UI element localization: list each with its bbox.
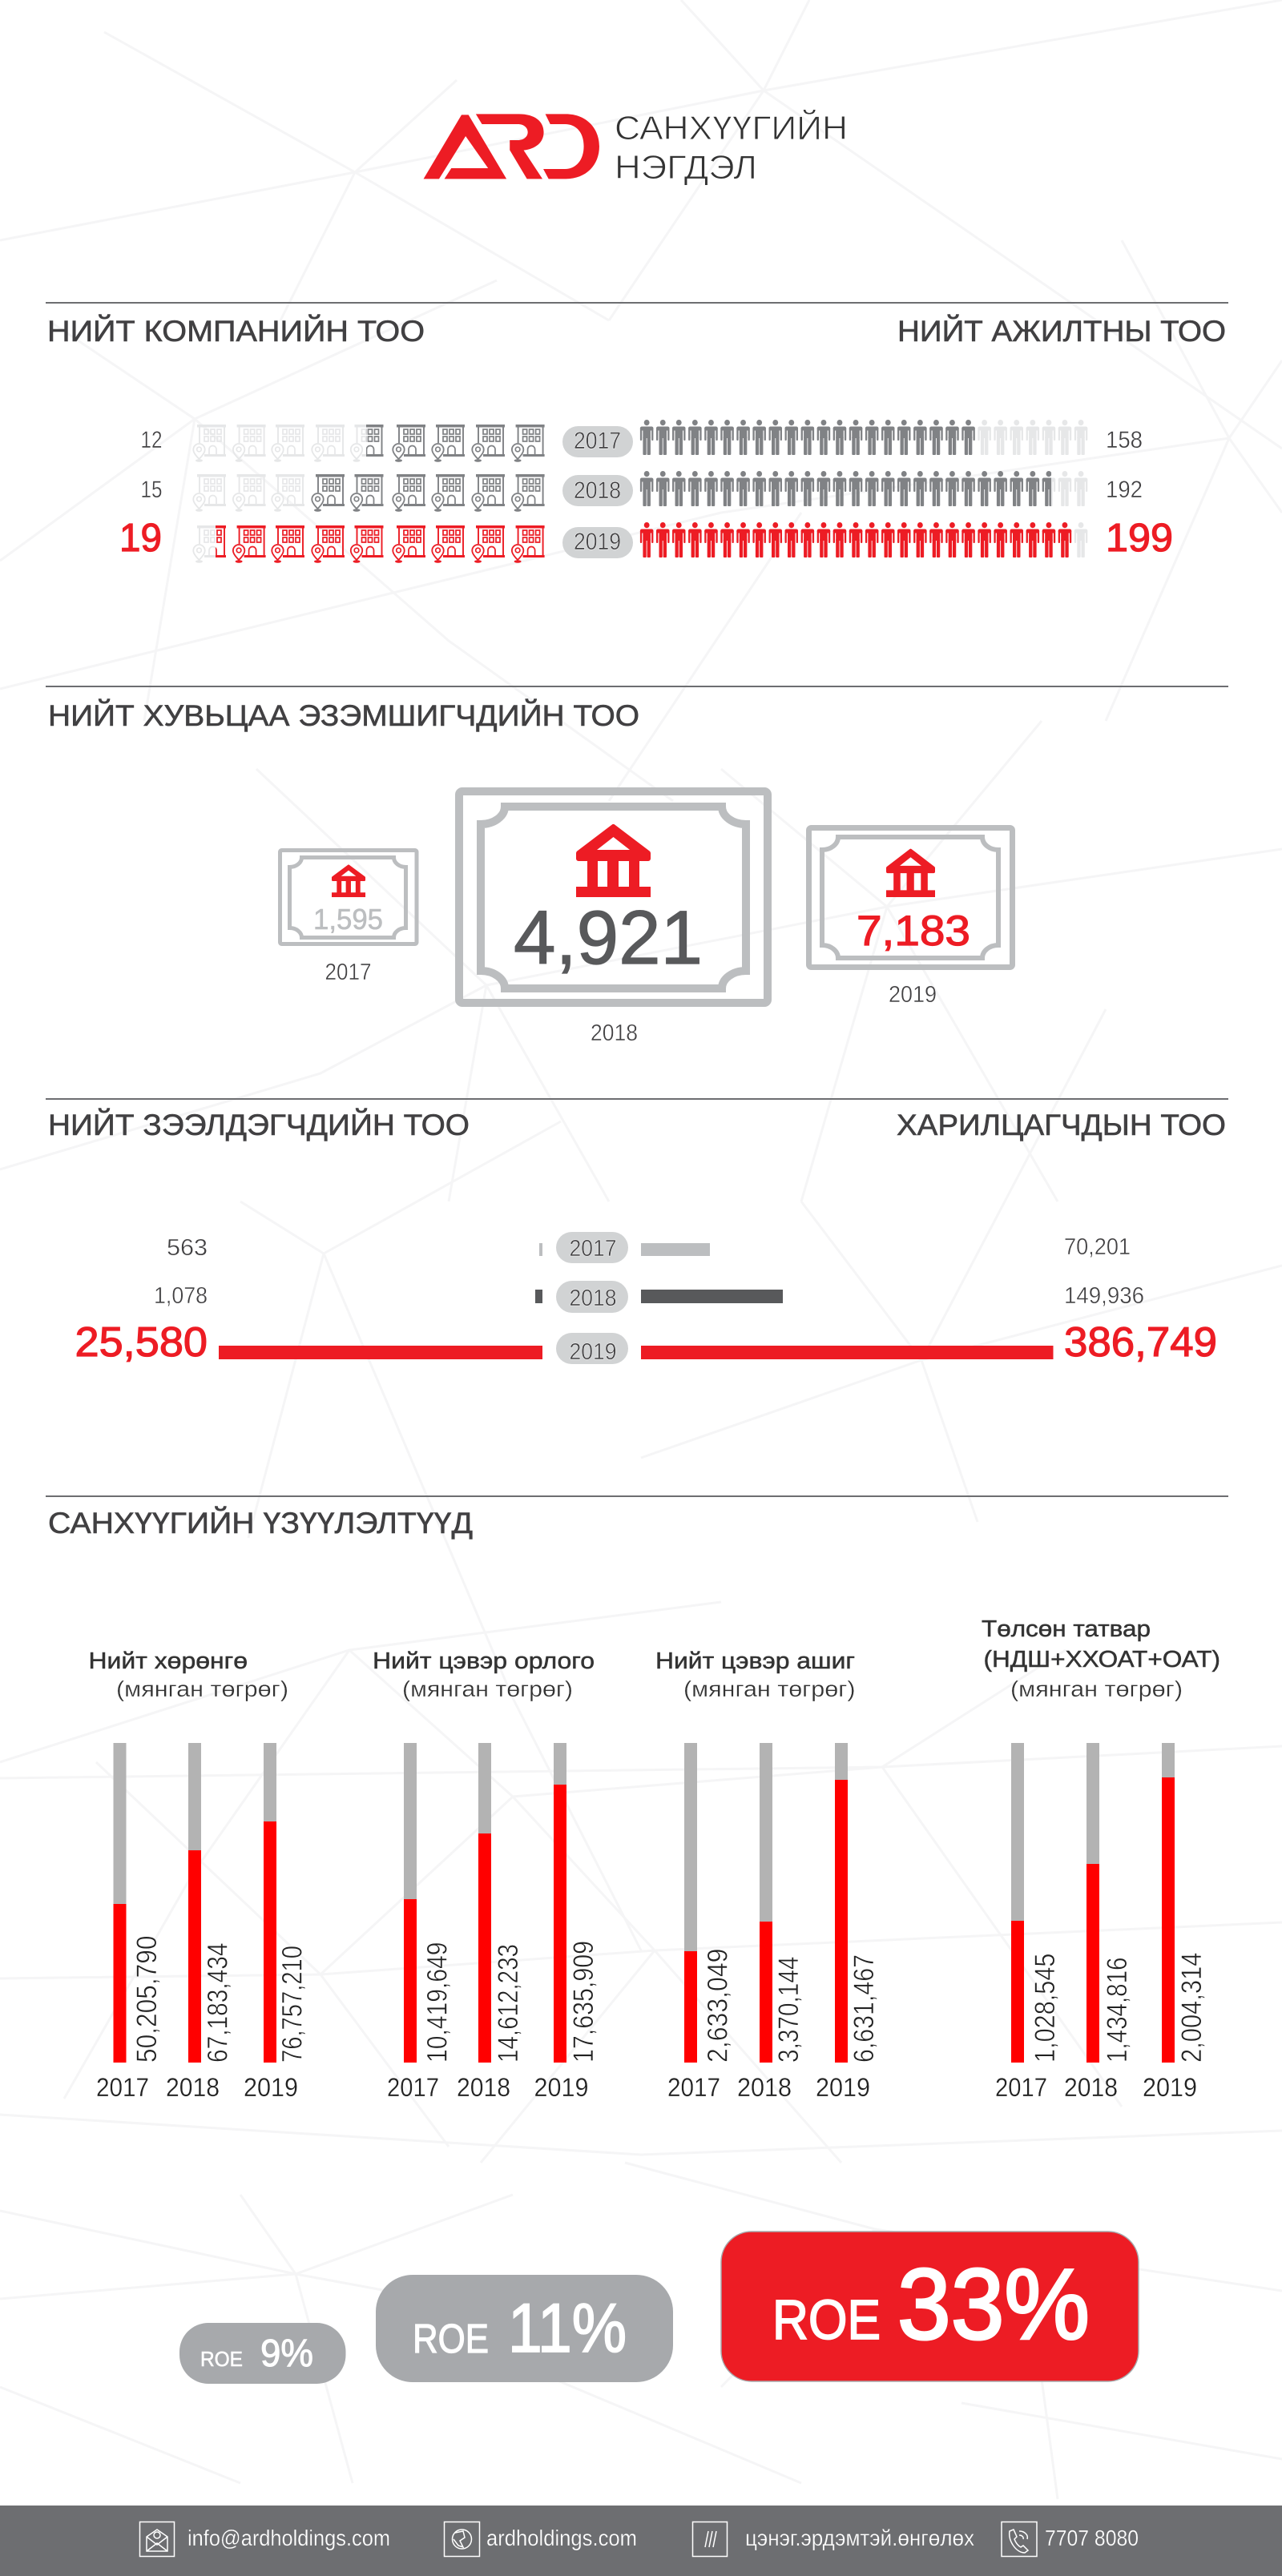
certificate 2017: 2017 [325, 960, 372, 985]
text: website: ardholdings.com [486, 2526, 637, 2550]
heading: financial indicators: САНХҮҮГИЙН ҮЗҮҮЛЭЛТҮҮД [48, 1506, 473, 1540]
icon row: buildings 2019 [193, 525, 545, 563]
employee counts: 158 [1106, 427, 1143, 453]
heading: total companies: НИЙТ КОМПАНИЙН ТОО [47, 314, 425, 348]
logo: ARD Санхүүгийн Нэгдэл [424, 108, 848, 186]
decorative section rules [46, 303, 1228, 1496]
chart title [655, 1648, 856, 1701]
chart title: (мянган төгрөг) [1010, 1676, 1183, 1701]
certificate 2017 [280, 851, 417, 985]
chart title: (мянган төгрөг) [116, 1676, 288, 1701]
icon: slashes [692, 2522, 728, 2557]
year pills [562, 426, 633, 558]
badge: ROE 11%: ROE [413, 2316, 489, 2361]
company counts: 12 [141, 427, 162, 453]
chart title [982, 1616, 1220, 1701]
text: slogan: цэнэг.эрдэмтэй.өнгөлөх [745, 2526, 974, 2550]
borrower values [75, 1235, 208, 1366]
certificate 2019: 2019 [889, 982, 937, 1008]
company counts: 15 [141, 477, 162, 503]
certificate 2019: 7,183 [857, 908, 970, 955]
chart title: Нийт цэвэр орлого [373, 1648, 595, 1674]
badge: ROE 11%: 11% [508, 2290, 627, 2367]
logo wordmark: САНХҮҮГИЙН [615, 108, 848, 147]
panel: financial indicators [48, 1506, 1220, 2102]
years [995, 2073, 1197, 2102]
values: 1,028,545 [1030, 1953, 1061, 2063]
certificate 2019 [809, 828, 1013, 1008]
values: 17,635,909 [568, 1941, 599, 2063]
icon row: buildings 2018 [193, 474, 545, 512]
chart title: Нийт хөрөнгө [88, 1648, 248, 1674]
values: 3,370,144 [773, 1956, 804, 2063]
panel: ROE badges [179, 2232, 1139, 2384]
years [96, 2073, 298, 2102]
customer values: 70,201 [1064, 1234, 1131, 1260]
year pills [556, 1232, 628, 1365]
chart: net income [373, 1648, 599, 2102]
certificate 2018 [459, 791, 768, 1046]
certificate 2018: 4,921 [514, 896, 703, 980]
chart title: (мянган төгрөг) [683, 1676, 856, 1701]
company counts [119, 427, 162, 560]
heading: total shareholders: НИЙТ ХУВЬЦАА ЭЗЭМШИГЧДИЙН ТОО [48, 698, 639, 732]
values [1030, 1953, 1207, 2063]
borrower values: 563 [167, 1235, 208, 1261]
values: 1,434,816 [1102, 1958, 1133, 2063]
panel: shareholders [48, 698, 1013, 1046]
customer values: 386,749 [1064, 1319, 1217, 1366]
chart: net profit [655, 1648, 880, 2102]
certificate 2018: 2018 [591, 1020, 638, 1046]
values [131, 1935, 308, 2063]
chart title: Төлсөн татвар [982, 1616, 1151, 1642]
years: 2019 [244, 2073, 298, 2102]
values: 6,631,467 [849, 1954, 880, 2063]
years: 2018 [737, 2073, 792, 2102]
text: phone: 7707 8080 [1045, 2526, 1139, 2550]
icon: website globe [444, 2522, 479, 2557]
employee counts: 199 [1106, 517, 1173, 560]
years: 2019 [816, 2073, 870, 2102]
badge: ROE 9%: 9% [260, 2332, 313, 2375]
years [387, 2073, 588, 2102]
years: 2017 [387, 2073, 439, 2102]
years: 2018 [166, 2073, 220, 2102]
bars [684, 1743, 848, 2063]
chart title [373, 1648, 595, 1701]
chart: taxes paid [982, 1616, 1220, 2102]
year pills: 2017 [574, 428, 621, 454]
chart: total assets [88, 1648, 308, 2102]
values: 10,419,649 [421, 1942, 454, 2063]
badge: ROE 9% [179, 2323, 346, 2384]
badge: ROE 33% [721, 2232, 1139, 2381]
years: 2017 [667, 2073, 720, 2102]
text: email: info@ardholdings.com [187, 2526, 390, 2550]
years: 2018 [1064, 2073, 1118, 2102]
values: 76,757,210 [277, 1946, 308, 2063]
values: 14,612,233 [493, 1944, 524, 2063]
years: 2017 [995, 2073, 1047, 2102]
icon row: people 2017 [640, 420, 1087, 455]
panel: borrowers and customers [48, 1108, 1226, 1366]
borrower values: 1,078 [154, 1283, 208, 1309]
company counts: 19 [119, 517, 162, 560]
chart title: (НДШ+ХХОАТ+ОАТ) [984, 1647, 1220, 1672]
icon: ARD logo mark [424, 114, 599, 179]
heading: total borrowers: НИЙТ ЗЭЭЛДЭГЧДИЙН ТОО [48, 1108, 470, 1141]
values [702, 1948, 880, 2063]
values: 2,004,314 [1176, 1953, 1207, 2063]
bar chart: borrowers [219, 1243, 542, 1359]
chart title: (мянган төгрөг) [402, 1676, 573, 1701]
bars [1011, 1743, 1175, 2063]
years: 2018 [457, 2073, 510, 2102]
badge: ROE 33%: 33% [897, 2249, 1090, 2361]
heading: total employees: НИЙТ АЖИЛТНЫ ТОО [897, 314, 1226, 348]
badge: ROE 11% [376, 2275, 673, 2382]
icon row: people 2019 [640, 522, 1087, 557]
customer values: 149,936 [1064, 1283, 1144, 1309]
values: 2,633,049 [702, 1948, 734, 2063]
year pills: 2017 [569, 1236, 617, 1262]
year pills: 2019 [569, 1339, 617, 1365]
certificate 2017: 1,595 [313, 903, 383, 936]
icon: phone [1002, 2522, 1037, 2557]
footer bar [0, 2506, 1282, 2576]
employee counts [1106, 427, 1173, 560]
values: 67,183,434 [202, 1943, 234, 2063]
employee counts: 192 [1106, 477, 1143, 503]
years: 2017 [96, 2073, 149, 2102]
bars [114, 1743, 276, 2063]
year pills: 2019 [574, 529, 621, 555]
heading: customers: ХАРИЛЦАГЧДЫН ТОО [897, 1109, 1226, 1141]
years: 2019 [1143, 2073, 1197, 2102]
logo wordmark [615, 108, 848, 186]
year pills: 2018 [574, 477, 621, 504]
bars [404, 1743, 566, 2063]
years [667, 2073, 870, 2102]
badge: ROE 33%: ROE [772, 2288, 881, 2351]
chart title: Нийт цэвэр ашиг [655, 1648, 855, 1674]
values [421, 1941, 599, 2063]
customer values [1064, 1234, 1217, 1366]
bar chart: customers [641, 1243, 1053, 1359]
icon row: buildings 2017 [193, 425, 545, 462]
icon: email [139, 2522, 175, 2557]
badge: ROE 9%: ROE [200, 2347, 243, 2371]
borrower values: 25,580 [75, 1319, 208, 1366]
chart title [88, 1648, 288, 1701]
values: 50,205,790 [131, 1935, 163, 2063]
icon row: people 2018 [640, 471, 1087, 506]
year pills: 2018 [569, 1286, 617, 1311]
years: 2019 [534, 2073, 588, 2102]
logo wordmark: НЭГДЭЛ [615, 148, 757, 186]
panel: companies and employees [47, 314, 1226, 563]
